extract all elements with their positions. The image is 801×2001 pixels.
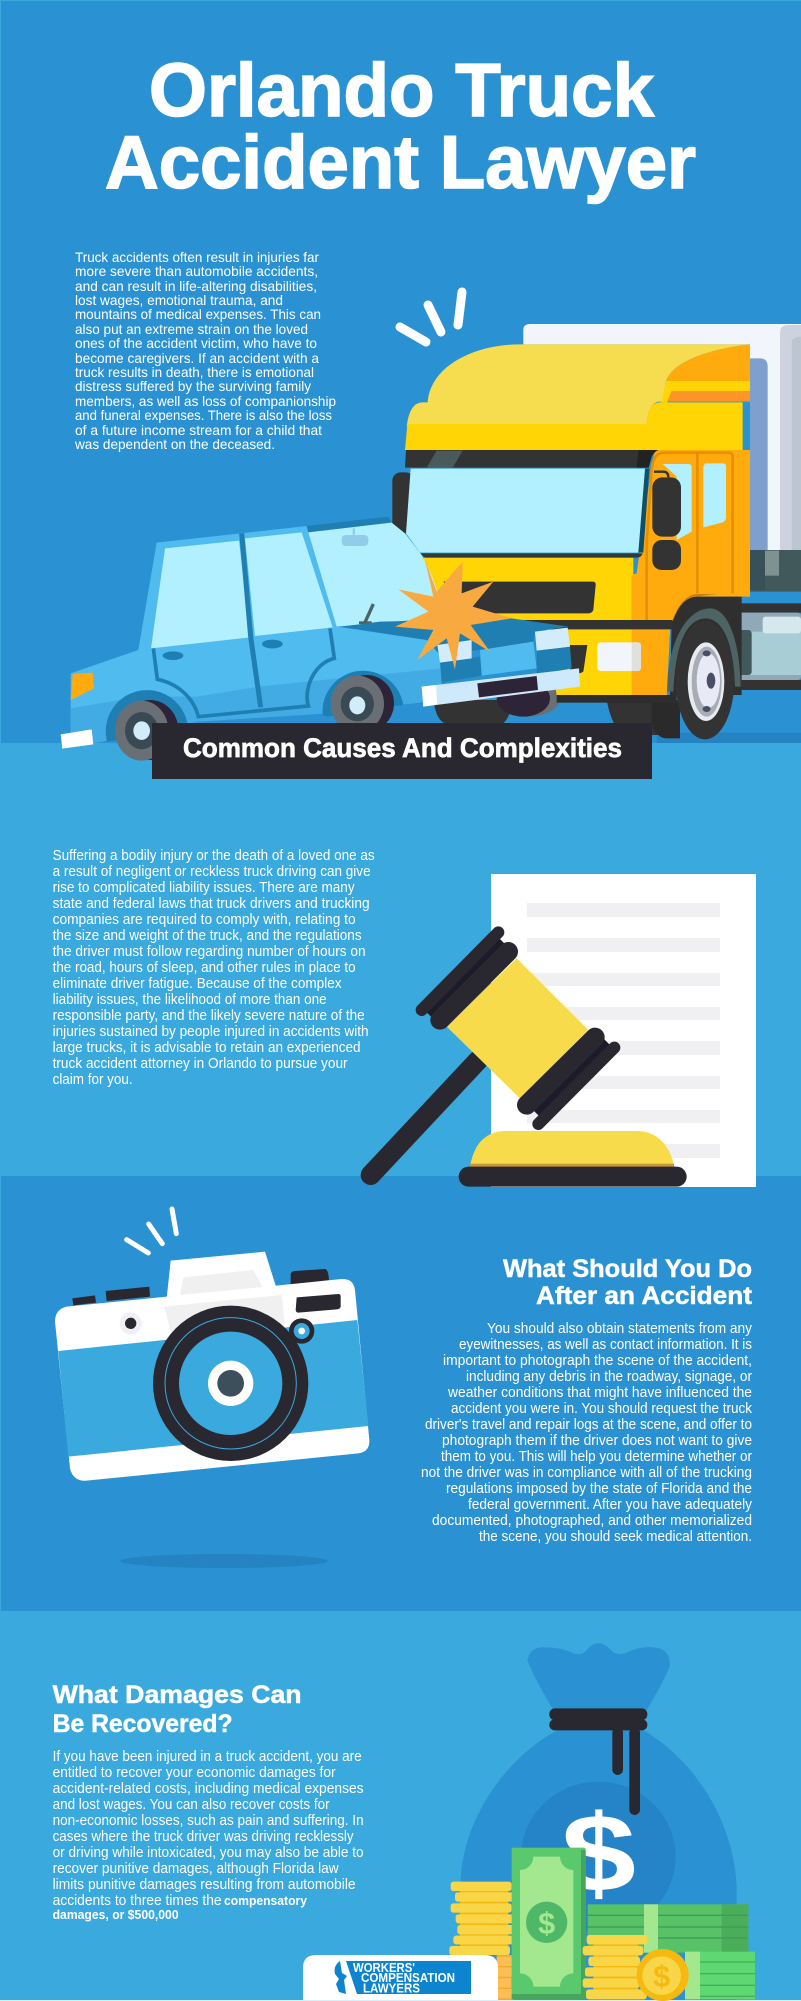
text block: what damages [53,1748,364,1922]
intro text block: and funeral expenses. There is also the loss [75,407,332,423]
icon: camera flash lines [127,1209,176,1253]
text block: common causes: state and federal laws that truck drivers and trucking [53,895,370,912]
large coin: $ [653,1960,670,1994]
text block: what damages: accident-related costs, including medical expenses [53,1780,364,1797]
text block: common causes [53,847,375,1088]
text block: common causes: large trucks, it is advisable to retain an experienced [53,1039,361,1056]
intro text block: and can result in life-altering disabilities, [75,278,317,294]
illustration: blue car [61,517,445,761]
text block: what should you do: federal government. After you have adequately [468,1496,752,1513]
illustration: money bag [461,1643,737,2000]
intro text block: become caregivers. If an accident with a [75,350,319,366]
logo [303,1955,498,2000]
text block: what should you do: weather conditions that might have influenced the [447,1384,752,1401]
logo: WORKERS' [353,1961,415,1975]
cash stack [588,1904,755,1999]
text block: common causes: the size and weight of the truck, and the regulations [53,927,362,944]
text block: common causes: Suffering a bodily injury or the death of a loved one as [53,847,375,864]
intro text block: was dependent on the deceased. [74,436,275,452]
intro text block: members, as well as loss of companionship [75,393,336,409]
intro text block [74,249,336,452]
text block: what damages: If you have been injured in a truck accident, you are [53,1748,362,1765]
intro text block: distress suffered by the surviving family [75,378,311,394]
intro text block: also put an extreme strain on the loved [75,321,308,337]
heading: what damages: Be Recovered? [53,1710,233,1738]
text block: common causes: eliminate driver fatigue. Because of the complex [53,975,342,992]
camera shadow [120,1554,328,1568]
text block: what should you do: photograph them if the driver does not want to give [442,1432,752,1449]
icon: impact flash lines [400,292,462,342]
dollar sign: $ [561,1792,636,1915]
text block: what should you do: including any debris in the roadway, signage, or [466,1368,752,1385]
text block: common causes: rise to complicated liability issues. There are many [53,879,355,896]
tall banknote [512,1848,586,1999]
intro text block: of a future income stream for a child that [75,422,322,438]
heading: what should you do: What Should You Do [503,1255,752,1283]
intro text block: mountains of medical expenses. This can [75,306,321,322]
text block: what damages: or driving while intoxicated, you may also be able to [53,1844,364,1861]
text block: what should you do: them to you. This will help you determine whether or [441,1448,752,1465]
coin stack left [449,1882,518,2000]
text block: what damages: entitled to recover your economic damages for [53,1764,336,1781]
illustration: cash and coins [449,1848,755,2001]
illustration: gavel [371,932,687,1187]
text block: what should you do: driver's travel and repair logs at the scene, and offer to [425,1416,752,1433]
truck wheels, rear layer [433,680,680,735]
illustration: camera [55,1209,369,1481]
title: Accident Lawyer [105,120,696,204]
intro text block: ones of the accident victim, who have to [75,335,317,351]
text block: what damages: non-economic losses, such as pain and suffering. In [53,1812,364,1829]
intro text block: truck results in death, there is emotional [75,364,314,380]
text block: common causes: the driver must follow regarding number of hours on [53,943,366,960]
logo: LAWYERS [363,1982,420,1996]
truck cab [392,344,750,695]
text block: what should you do: eyewitnesses, as well as contact information. It is [459,1336,752,1353]
text block: what should you do: You should also obtain statements from any [487,1320,752,1337]
heading: what damages [53,1681,302,1738]
car front wheel [323,671,403,732]
text block: common causes: responsible party, and the likely severe nature of the [53,1007,365,1024]
text block: what should you do: the scene, you should seek medical attention. [479,1528,752,1545]
text block: common causes: injuries sustained by people injured in accidents with [53,1023,369,1040]
text block: what should you do: important to photograph the scene of the accident, [443,1352,752,1369]
text block: what damages: recover punitive damages, although Florida law [53,1860,339,1877]
banner heading [152,723,652,779]
text block: what should you do: not the driver was in compliance with all of the trucking [421,1464,752,1481]
heading: what should you do [503,1255,753,1310]
coin stack right [583,1935,647,1999]
text block: what damages: accidents to three times the [53,1892,222,1909]
title [105,48,696,204]
intro text block: lost wages, emotional trauma, and [75,292,283,308]
intro text block: more severe than automobile accidents, [75,263,318,279]
text block: what should you do: documented, photographed, and other memorialized [432,1512,752,1529]
illustration: truck [392,324,801,743]
text block: what should you do [421,1320,752,1545]
intro text block: Truck accidents often result in injuries far [75,249,319,265]
text block: common causes: the road, hours of sleep, and other rules in place to [53,959,356,976]
icon: crash burst [395,560,512,669]
title: Orlando Truck [149,48,654,132]
text block: what damages: limits punitive damages resulting from automobile [53,1876,356,1893]
illustration: document [491,874,756,1187]
text block: what damages: compensatory [224,1894,307,1908]
text block: what damages: and lost wages. You can also recover costs for [53,1796,330,1813]
heading: what should you do: After an Accident [536,1282,753,1310]
car front end [342,560,580,707]
text block: common causes: truck accident attorney in Orlando to pursue your [53,1055,348,1072]
text block: what damages: damages, or $500,000 [53,1908,179,1922]
text block: common causes: claim for you. [53,1071,133,1088]
text block: what should you do: accident you were in. You should request the truck [451,1400,752,1417]
truck front wheel [652,594,742,739]
car rear wheel [106,690,187,761]
text block: what should you do: regulations imposed by the state of Florida and the [446,1480,752,1497]
text block: common causes: liability issues, the likelihood of more than one [53,991,327,1008]
logo: COMPENSATION [361,1971,455,1985]
heading: what damages: What Damages Can [53,1681,302,1709]
banner heading: Common Causes And Complexities [183,733,622,763]
text block: common causes: a result of negligent or reckless truck driving can give [53,863,371,880]
text block: what damages: cases where the truck driver was driving recklessly [53,1828,354,1845]
text block: common causes: companies are required to comply with, relating to [53,911,356,928]
tall banknote: $ [538,1906,555,1940]
large coin [637,1949,689,2001]
